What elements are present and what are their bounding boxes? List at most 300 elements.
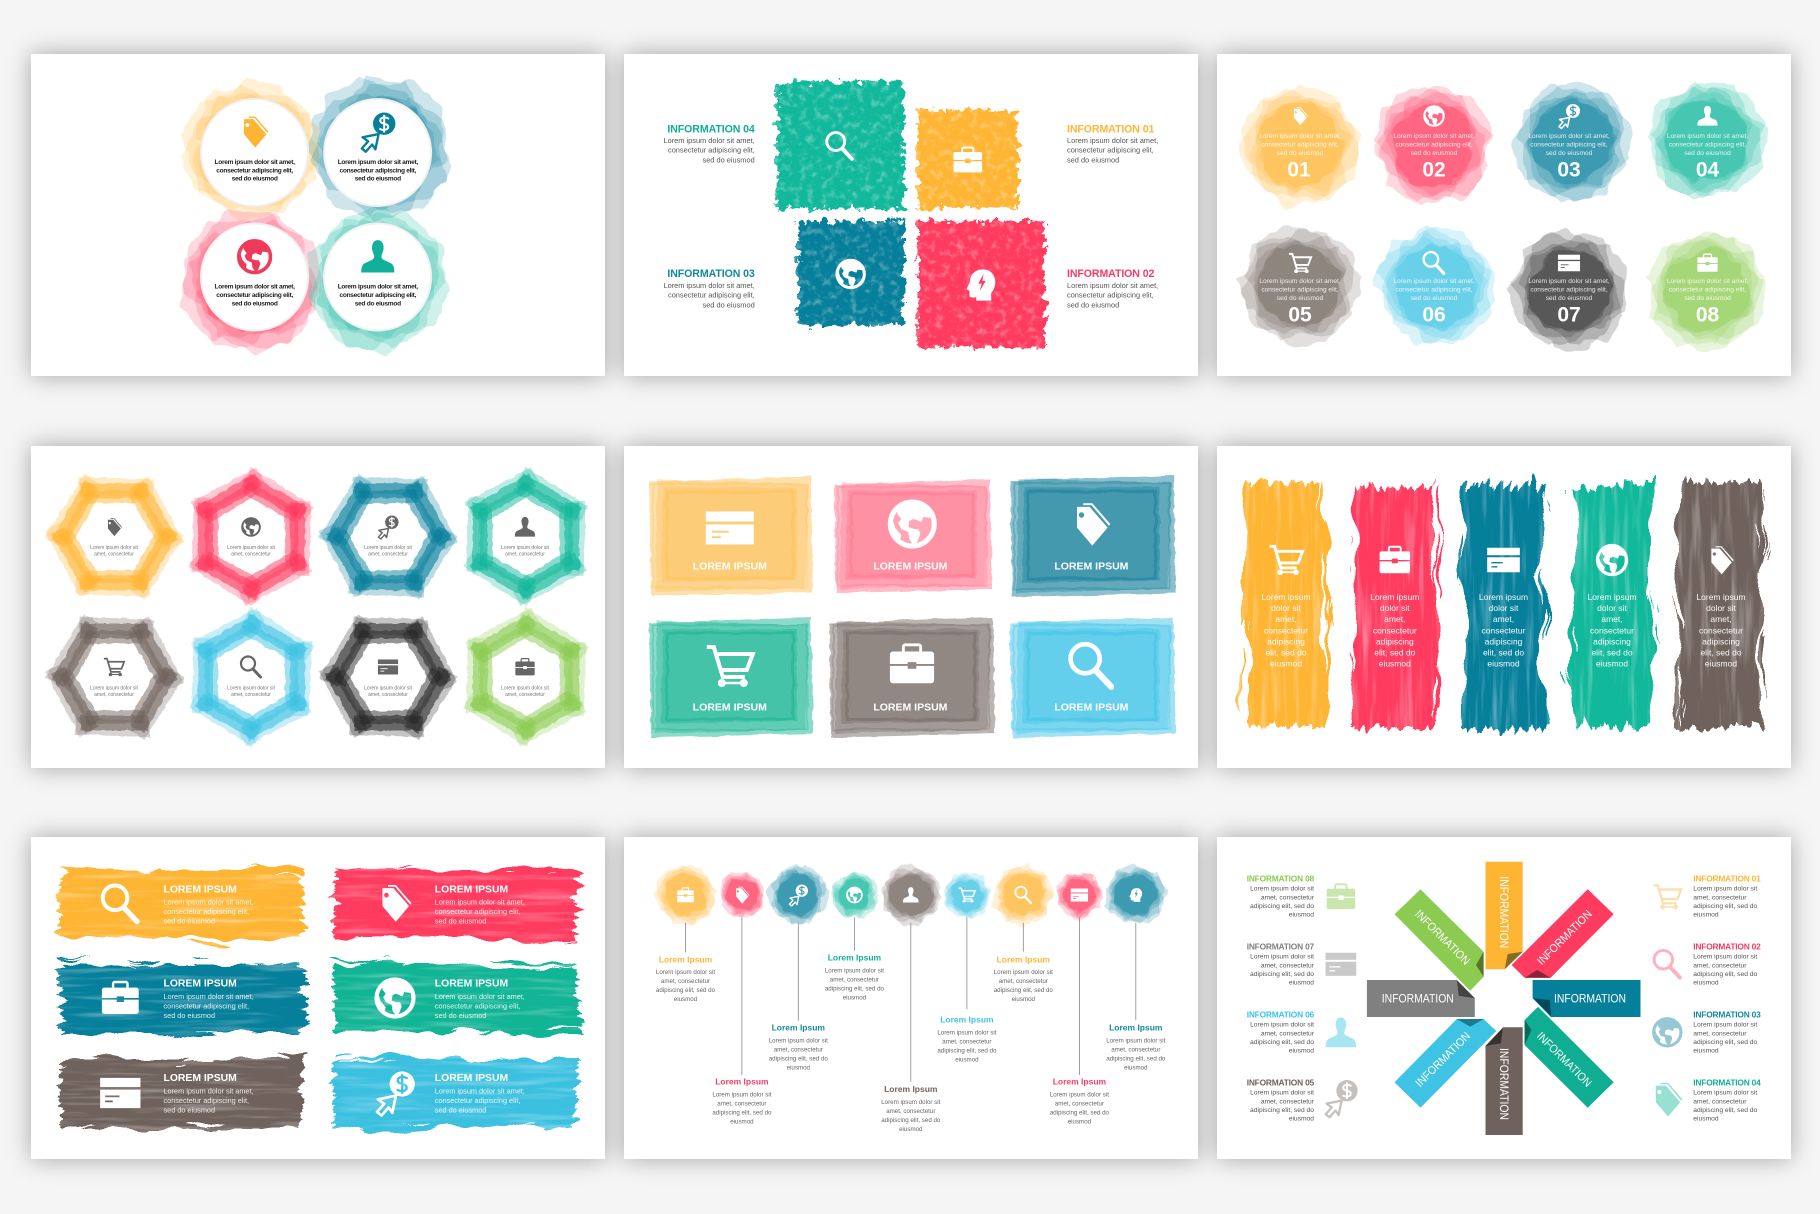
step 8: Lorem ipsum dolor sit <box>1050 1092 1109 1099</box>
step 6 <box>937 888 997 1064</box>
tile: magnifier: LOREM IPSUM <box>1054 702 1129 714</box>
stroke 5 brown: eiusmod <box>1705 659 1737 669</box>
card: tag circle: sed do eiusmod <box>232 176 278 183</box>
banner 3 blue: LOREM IPSUM <box>164 979 237 990</box>
text: information 03: consectetur adipiscing elit, <box>668 291 755 300</box>
item: information 02: eiusmod <box>1693 980 1719 986</box>
blob 04 content: consectetur adipiscing elit, <box>1669 142 1746 148</box>
step 1: amet, consectetur <box>661 978 710 985</box>
text: information 04: INFORMATION 04 <box>667 123 755 135</box>
panel: framed rectangles <box>624 446 1198 768</box>
step 2: Lorem ipsum dolor sit <box>712 1092 772 1099</box>
stroke 1 orange: adipiscing <box>1267 636 1305 646</box>
item: information 08 <box>1247 874 1355 918</box>
stroke 3 blue: amet, <box>1493 614 1514 624</box>
step 2: adipiscing elit, sed do <box>712 1110 772 1117</box>
item: information 04 <box>1656 1078 1761 1122</box>
stroke 4 teal: eiusmod <box>1596 659 1628 669</box>
stroke 3 blue: eiusmod <box>1487 659 1520 669</box>
step 8: eiusmod <box>1068 1119 1092 1126</box>
step 7: eiusmod <box>1012 996 1036 1003</box>
ribbon brown: INFORMATION <box>1497 1048 1509 1120</box>
ribbon green: INFORMATION <box>1412 908 1472 968</box>
watercolor blobs <box>145 32 496 387</box>
stroke 1 orange: amet, <box>1275 614 1297 624</box>
blob 03 content: Lorem ipsum dolor sit amet, <box>1528 133 1610 140</box>
stroke 2 red: dolor sit <box>1380 603 1410 613</box>
blob 08 content: sed do eiusmod <box>1684 295 1731 302</box>
hexagon content 4 <box>501 517 550 558</box>
text: information 03: sed do eiusmod <box>703 300 755 309</box>
square: blue globe <box>798 221 904 325</box>
blob 06 content: sed do eiusmod <box>1411 295 1458 302</box>
card: dollar circle: Lorem ipsum dolor sit amet, <box>338 159 418 166</box>
ribbon teal: INFORMATION <box>1534 1030 1593 1090</box>
stroke 3 blue: Lorem ipsum <box>1479 592 1528 602</box>
step 3: Lorem Ipsum <box>772 1022 825 1032</box>
stroke 5 brown: amet, <box>1710 614 1732 624</box>
step 3: eiusmod <box>787 1064 811 1071</box>
card: tag circle <box>201 99 308 206</box>
tile: card <box>693 511 767 572</box>
card: person circle: Lorem ipsum dolor sit amet, <box>338 284 418 291</box>
panel: vertical brush strokes <box>1217 446 1791 768</box>
tile: magnifier <box>1054 644 1129 714</box>
item: information 04: amet, consectetur <box>1693 1098 1747 1105</box>
text: information 04: consectetur adipiscing elit, <box>668 146 755 155</box>
item: information 01: Lorem ipsum dolor sit <box>1693 886 1757 893</box>
hexagon content 1: amet, consectetur <box>94 552 134 558</box>
item: information 08: amet, consectetur <box>1261 894 1315 901</box>
text: information 03 <box>664 268 755 309</box>
hexagon content 6: Lorem ipsum dolor sit <box>227 686 276 692</box>
item: information 05 <box>1247 1078 1358 1122</box>
stroke 2 red <box>1354 484 1435 729</box>
blob 03 content: sed do eiusmod <box>1546 150 1593 157</box>
blob 08 content: 08 <box>1696 304 1719 327</box>
step 9: eiusmod <box>1124 1064 1148 1071</box>
banner 1 orange: consectetur adipiscing elit, <box>164 907 249 916</box>
banner 4 teal: LOREM IPSUM <box>435 979 508 990</box>
item: information 05: amet, consectetur <box>1261 1098 1315 1105</box>
item: information 01: INFORMATION 01 <box>1693 874 1761 884</box>
step 5: Lorem ipsum dolor sit <box>881 1099 941 1106</box>
step 2: amet, consectetur <box>717 1101 766 1108</box>
step 5: eiusmod <box>899 1126 923 1133</box>
step 3: adipiscing elit, sed do <box>769 1055 828 1062</box>
step 4: amet, consectetur <box>830 976 879 983</box>
panel: timeline of blobs <box>624 837 1198 1159</box>
step 9 <box>1106 888 1166 1071</box>
blob 08 content: Lorem ipsum dolor sit amet, <box>1667 278 1748 285</box>
item: information 03: adipiscing elit, sed do <box>1693 1039 1758 1046</box>
item: information 07: adipiscing elit, sed do <box>1250 971 1314 978</box>
hexagon content 5 <box>90 659 139 698</box>
blob 01 content: 01 <box>1287 159 1311 182</box>
card: globe circle: Lorem ipsum dolor sit amet, <box>214 284 295 291</box>
blob 07 content: consectetur adipiscing elit, <box>1530 286 1608 294</box>
blob 03 content <box>1528 104 1610 182</box>
text: information 01: sed do eiusmod <box>1067 155 1119 164</box>
banner 3 blue <box>62 964 303 1033</box>
item: information 03: Lorem ipsum dolor sit <box>1693 1022 1757 1029</box>
hexagon content 7 <box>364 659 413 698</box>
tile: card: LOREM IPSUM <box>693 560 767 572</box>
card: person circle: sed do eiusmod <box>355 300 401 307</box>
banner 2 red: sed do eiusmod <box>435 917 486 926</box>
hexagon content 4: amet, consectetur <box>505 552 545 558</box>
stroke 4 teal: consectetur <box>1590 625 1634 635</box>
blob 07 content: sed do eiusmod <box>1546 295 1593 302</box>
ribbon red: INFORMATION <box>1535 908 1595 968</box>
stroke 2 red: elit, sed do <box>1374 648 1416 658</box>
hexagon content 7: Lorem ipsum dolor sit <box>364 686 413 692</box>
banner 5 brown: sed do eiusmod <box>164 1105 215 1114</box>
banner 2 red: consectetur adipiscing elit, <box>435 907 520 916</box>
blob 02 content: 02 <box>1422 159 1446 182</box>
text: information 04: sed do eiusmod <box>703 155 755 164</box>
stroke 2 red: Lorem ipsum <box>1370 592 1419 602</box>
stroke 4 teal: Lorem ipsum <box>1587 592 1637 602</box>
item: information 01: amet, consectetur <box>1693 894 1747 901</box>
banner 2 red <box>335 869 576 939</box>
ribbon teal <box>1525 1007 1614 1108</box>
step 6: adipiscing elit, sed do <box>937 1048 997 1055</box>
item: information 05: Lorem ipsum dolor sit <box>1250 1090 1314 1097</box>
hexagon content 3 <box>364 515 413 558</box>
step 8: amet, consectetur <box>1055 1101 1104 1108</box>
step 7: amet, consectetur <box>999 978 1048 985</box>
step 1: Lorem Ipsum <box>659 954 713 964</box>
step 1: adipiscing elit, sed do <box>656 987 716 994</box>
blob 03 content: 03 <box>1557 159 1581 182</box>
ribbon cyan <box>1394 1019 1496 1108</box>
blob 02 content: consectetur adipiscing elit, <box>1395 142 1473 148</box>
banner 4 teal: Lorem ipsum dolor sit amet, <box>435 992 525 1001</box>
item: information 04: adipiscing elit, sed do <box>1693 1107 1758 1114</box>
card: tag circle: Lorem ipsum dolor sit amet, <box>214 159 295 166</box>
hexagon content 4: Lorem ipsum dolor sit <box>501 545 550 551</box>
text: information 02: consectetur adipiscing elit, <box>1067 291 1154 300</box>
ribbon brown <box>1486 1027 1523 1135</box>
stroke 1 orange <box>1246 484 1326 729</box>
hexagon content 2: Lorem ipsum dolor sit <box>227 545 276 551</box>
blob 04 content: Lorem ipsum dolor sit amet, <box>1667 133 1748 140</box>
hexagon content 1: Lorem ipsum dolor sit <box>90 545 139 551</box>
panel: folded ribbon wheel <box>1217 837 1791 1159</box>
item: information 02: INFORMATION 02 <box>1693 942 1761 952</box>
blob 08 content: consectetur adipiscing elit, <box>1669 286 1746 294</box>
banner 5 brown: Lorem ipsum dolor sit amet, <box>164 1086 254 1095</box>
hexagon content 2: amet, consectetur <box>231 552 271 558</box>
stroke 1 orange: Lorem ipsum <box>1261 592 1311 602</box>
tile: tag: LOREM IPSUM <box>1054 560 1129 572</box>
ribbon orange: INFORMATION <box>1497 876 1509 948</box>
text: information 03: INFORMATION 03 <box>667 268 755 280</box>
item: information 06: amet, consectetur <box>1261 1030 1315 1037</box>
blob 06 content <box>1393 252 1475 327</box>
text: information 03: Lorem ipsum dolor sit amet, <box>664 281 755 290</box>
item: information 02 <box>1654 942 1761 986</box>
text: information 02: INFORMATION 02 <box>1067 268 1154 280</box>
stroke 1 orange: consectetur <box>1264 625 1308 635</box>
banner 6 cyan <box>335 1058 576 1128</box>
stroke 3 blue: dolor sit <box>1489 603 1519 613</box>
card: globe circle: sed do eiusmod <box>232 300 278 307</box>
banner 6 cyan: Lorem ipsum dolor sit amet, <box>435 1086 525 1095</box>
hexagon content 5: Lorem ipsum dolor sit <box>90 686 139 692</box>
item: information 01: eiusmod <box>1693 912 1719 918</box>
step 6: eiusmod <box>955 1057 979 1064</box>
banner 3 blue: Lorem ipsum dolor sit amet, <box>164 992 254 1001</box>
tile: tag <box>1054 503 1129 572</box>
card: dollar circle: consectetur adipiscing elit, <box>339 167 417 174</box>
item: information 05: INFORMATION 05 <box>1247 1078 1315 1088</box>
card: globe circle <box>201 224 308 330</box>
step 3 <box>769 884 828 1071</box>
step 9: amet, consectetur <box>1111 1046 1160 1053</box>
stroke 1 orange: dolor sit <box>1271 603 1302 613</box>
timeline blobs <box>642 851 1180 939</box>
square: orange briefcase <box>918 110 1018 208</box>
stroke 5 brown: elit, sed do <box>1700 648 1742 658</box>
stroke 5 brown: consectetur <box>1699 625 1743 635</box>
hexagon rings <box>50 453 612 761</box>
stroke 4 teal <box>1572 484 1653 729</box>
item: information 02: Lorem ipsum dolor sit <box>1693 954 1757 961</box>
text: information 01 <box>1067 123 1158 164</box>
banner 1 orange <box>62 869 303 939</box>
tile: briefcase: LOREM IPSUM <box>873 702 948 714</box>
step 5: amet, consectetur <box>886 1108 935 1115</box>
stroke 1 orange: eiusmod <box>1270 659 1302 669</box>
stroke 4 teal: amet, <box>1601 614 1623 624</box>
banner 2 red: Lorem ipsum dolor sit amet, <box>435 898 525 907</box>
step 1: eiusmod <box>674 996 698 1003</box>
step 8 <box>1050 889 1110 1126</box>
step 7: Lorem ipsum dolor sit <box>994 969 1053 976</box>
blob 01 content <box>1259 107 1341 182</box>
ribbon grey: INFORMATION <box>1382 993 1454 1005</box>
banner 4 teal: consectetur adipiscing elit, <box>435 1002 520 1011</box>
step 6: Lorem ipsum dolor sit <box>937 1030 997 1037</box>
ribbon orange <box>1486 862 1523 969</box>
stroke 3 blue: elit, sed do <box>1483 648 1524 658</box>
hexagon content 8: Lorem ipsum dolor sit <box>501 686 550 692</box>
blob 06 content: 06 <box>1422 304 1446 327</box>
item: information 08: INFORMATION 08 <box>1247 874 1315 884</box>
square: red head <box>918 221 1045 347</box>
step 4: eiusmod <box>843 994 867 1001</box>
banner 1 orange: LOREM IPSUM <box>164 884 237 895</box>
step 3: amet, consectetur <box>774 1046 823 1053</box>
step 2 <box>712 887 772 1126</box>
blob 01 content: sed do eiusmod <box>1277 150 1324 157</box>
card: tag circle: consectetur adipiscing elit, <box>216 167 293 174</box>
blob 04 content <box>1667 106 1748 182</box>
banner 5 brown <box>62 1058 303 1128</box>
stroke 3 blue <box>1463 484 1544 729</box>
text: information 01: Lorem ipsum dolor sit amet, <box>1067 136 1158 145</box>
hexagon content 3: amet, consectetur <box>368 552 408 558</box>
ribbon green <box>1394 889 1484 991</box>
banner 6 cyan: LOREM IPSUM <box>435 1073 508 1084</box>
blob 05 content <box>1259 254 1341 327</box>
item: information 03: eiusmod <box>1693 1048 1719 1054</box>
ribbon red <box>1512 889 1614 978</box>
step 3: Lorem ipsum dolor sit <box>769 1037 828 1044</box>
tile: briefcase <box>873 645 948 714</box>
banner 5 brown: consectetur adipiscing elit, <box>164 1096 249 1105</box>
step 9: Lorem ipsum dolor sit <box>1106 1037 1166 1044</box>
item: information 04: Lorem ipsum dolor sit <box>1693 1090 1757 1097</box>
blob 01 content: consectetur adipiscing elit, <box>1261 142 1339 148</box>
item: information 06: eiusmod <box>1289 1048 1314 1054</box>
banner 1 orange: sed do eiusmod <box>164 917 215 926</box>
stroke 4 teal: elit, sed do <box>1591 648 1633 658</box>
blob 08 content <box>1667 254 1748 327</box>
text: information 01: INFORMATION 01 <box>1067 123 1154 135</box>
item: information 04: INFORMATION 04 <box>1693 1078 1761 1088</box>
item: information 07: eiusmod <box>1289 980 1314 986</box>
card: globe circle: consectetur adipiscing elit, <box>216 292 293 299</box>
blob 05 content: Lorem ipsum dolor sit amet, <box>1259 278 1341 285</box>
blob 07 content: 07 <box>1557 304 1581 327</box>
step 1 <box>656 888 716 1003</box>
stroke 4 teal: adipiscing <box>1593 636 1631 646</box>
card: dollar circle <box>324 99 431 206</box>
step 1: Lorem ipsum dolor sit <box>656 969 715 976</box>
item: information 05: adipiscing elit, sed do <box>1250 1107 1314 1114</box>
banner 1 orange: Lorem ipsum dolor sit amet, <box>164 898 254 907</box>
stroke 5 brown: Lorem ipsum <box>1696 592 1746 602</box>
hexagon content 6: amet, consectetur <box>231 692 271 698</box>
stroke 2 red: adipiscing <box>1376 636 1414 646</box>
item: information 07: amet, consectetur <box>1261 962 1315 969</box>
banner 4 teal <box>335 964 576 1033</box>
item: information 06 <box>1247 1010 1356 1054</box>
text: information 02 <box>1067 268 1158 309</box>
step 7 <box>994 887 1053 1003</box>
banner 2 red: LOREM IPSUM <box>435 884 508 895</box>
card: dollar circle: sed do eiusmod <box>355 176 401 183</box>
step 5: Lorem Ipsum <box>884 1084 938 1094</box>
text: information 02: Lorem ipsum dolor sit amet, <box>1067 281 1158 290</box>
step 6: amet, consectetur <box>942 1039 991 1046</box>
text: information 01: consectetur adipiscing elit, <box>1067 146 1154 155</box>
item: information 08: adipiscing elit, sed do <box>1250 903 1314 910</box>
text: information 02: sed do eiusmod <box>1067 300 1119 309</box>
step 4: Lorem ipsum dolor sit <box>825 967 884 974</box>
hexagon content 8: amet, consectetur <box>505 692 545 698</box>
stroke 2 red: consectetur <box>1373 625 1417 635</box>
hexagon content 3: Lorem ipsum dolor sit <box>364 545 413 551</box>
tile: cart: LOREM IPSUM <box>693 702 767 714</box>
stroke 2 red: eiusmod <box>1379 659 1411 669</box>
hexagon content 5: amet, consectetur <box>94 692 134 698</box>
item: information 03: INFORMATION 03 <box>1693 1010 1761 1020</box>
banner 6 cyan: sed do eiusmod <box>435 1105 486 1114</box>
hexagon content 1 <box>90 518 139 558</box>
ribbon blue: INFORMATION <box>1554 993 1626 1005</box>
banner 3 blue: sed do eiusmod <box>164 1011 215 1020</box>
hexagon content 7: amet, consectetur <box>368 692 408 698</box>
hexagon content 8 <box>501 659 550 698</box>
stroke 2 red: amet, <box>1384 614 1405 624</box>
stroke 3 blue: adipiscing <box>1485 636 1523 646</box>
blob 05 content: consectetur adipiscing elit, <box>1261 286 1339 294</box>
tile: cart <box>693 647 767 714</box>
panel: brushed hexagons <box>31 446 612 768</box>
panel: horizontal brush banners <box>31 837 605 1159</box>
item: information 06: INFORMATION 06 <box>1247 1010 1315 1020</box>
banner 3 blue: consectetur adipiscing elit, <box>164 1002 249 1011</box>
step 8: adipiscing elit, sed do <box>1050 1110 1110 1117</box>
blob 06 content: consectetur adipiscing elit, <box>1395 286 1473 294</box>
banner 5 brown: LOREM IPSUM <box>164 1073 237 1084</box>
step 5: adipiscing elit, sed do <box>881 1117 941 1124</box>
item: information 01 <box>1654 874 1761 918</box>
stroke 5 brown: dolor sit <box>1706 603 1737 613</box>
hexagon content 6 <box>227 656 276 698</box>
frame textures <box>649 475 1176 738</box>
step 4 <box>825 887 885 1001</box>
stroke 4 teal: dolor sit <box>1597 603 1628 613</box>
blob 06 content: Lorem ipsum dolor sit amet, <box>1393 278 1475 285</box>
blob 03 content: consectetur adipiscing elit, <box>1530 142 1608 148</box>
blob 04 content: sed do eiusmod <box>1684 150 1731 157</box>
ribbon cyan: INFORMATION <box>1414 1030 1473 1090</box>
text: information 04: Lorem ipsum dolor sit amet, <box>664 136 755 145</box>
item: information 03 <box>1654 1010 1761 1054</box>
step 9: Lorem Ipsum <box>1109 1022 1163 1032</box>
blob 04 content: 04 <box>1696 159 1719 182</box>
blob 02 content: sed do eiusmod <box>1411 150 1458 157</box>
blob 02 content: Lorem ipsum dolor sit amet, <box>1393 133 1475 140</box>
step 6: Lorem Ipsum <box>940 1015 994 1025</box>
stroke 5 brown: adipiscing <box>1702 636 1740 646</box>
item: information 07: Lorem ipsum dolor sit <box>1250 954 1314 961</box>
panel: brush squares <box>624 54 1198 376</box>
stroke 3 blue: consectetur <box>1482 625 1526 635</box>
item: information 02: amet, consectetur <box>1693 962 1747 969</box>
item: information 02: adipiscing elit, sed do <box>1693 971 1758 978</box>
step 7: Lorem Ipsum <box>997 954 1050 964</box>
stroke 1 orange: elit, sed do <box>1265 648 1307 658</box>
card: person circle: consectetur adipiscing elit, <box>339 292 417 299</box>
item: information 06: adipiscing elit, sed do <box>1250 1039 1314 1046</box>
text: information 04 <box>664 123 755 164</box>
blob 07 content <box>1528 255 1610 327</box>
step 2: Lorem Ipsum <box>715 1077 769 1087</box>
banner 4 teal: sed do eiusmod <box>435 1011 486 1020</box>
item: information 08: eiusmod <box>1289 912 1314 918</box>
blob 07 content: Lorem ipsum dolor sit amet, <box>1528 278 1610 285</box>
item: information 05: eiusmod <box>1289 1116 1314 1122</box>
item: information 06: Lorem ipsum dolor sit <box>1250 1022 1314 1029</box>
square: teal search <box>777 82 904 209</box>
item: information 07: INFORMATION 07 <box>1247 942 1315 952</box>
step 9: adipiscing elit, sed do <box>1106 1055 1166 1062</box>
blob 01 content: Lorem ipsum dolor sit amet, <box>1259 133 1341 140</box>
tile: globe <box>873 502 948 572</box>
tile: globe: LOREM IPSUM <box>873 560 948 572</box>
ribbon blue <box>1533 980 1640 1017</box>
step 5 <box>881 887 941 1133</box>
step 4: Lorem Ipsum <box>828 952 882 962</box>
banner 6 cyan: consectetur adipiscing elit, <box>435 1096 520 1105</box>
blob 02 content <box>1393 106 1475 182</box>
